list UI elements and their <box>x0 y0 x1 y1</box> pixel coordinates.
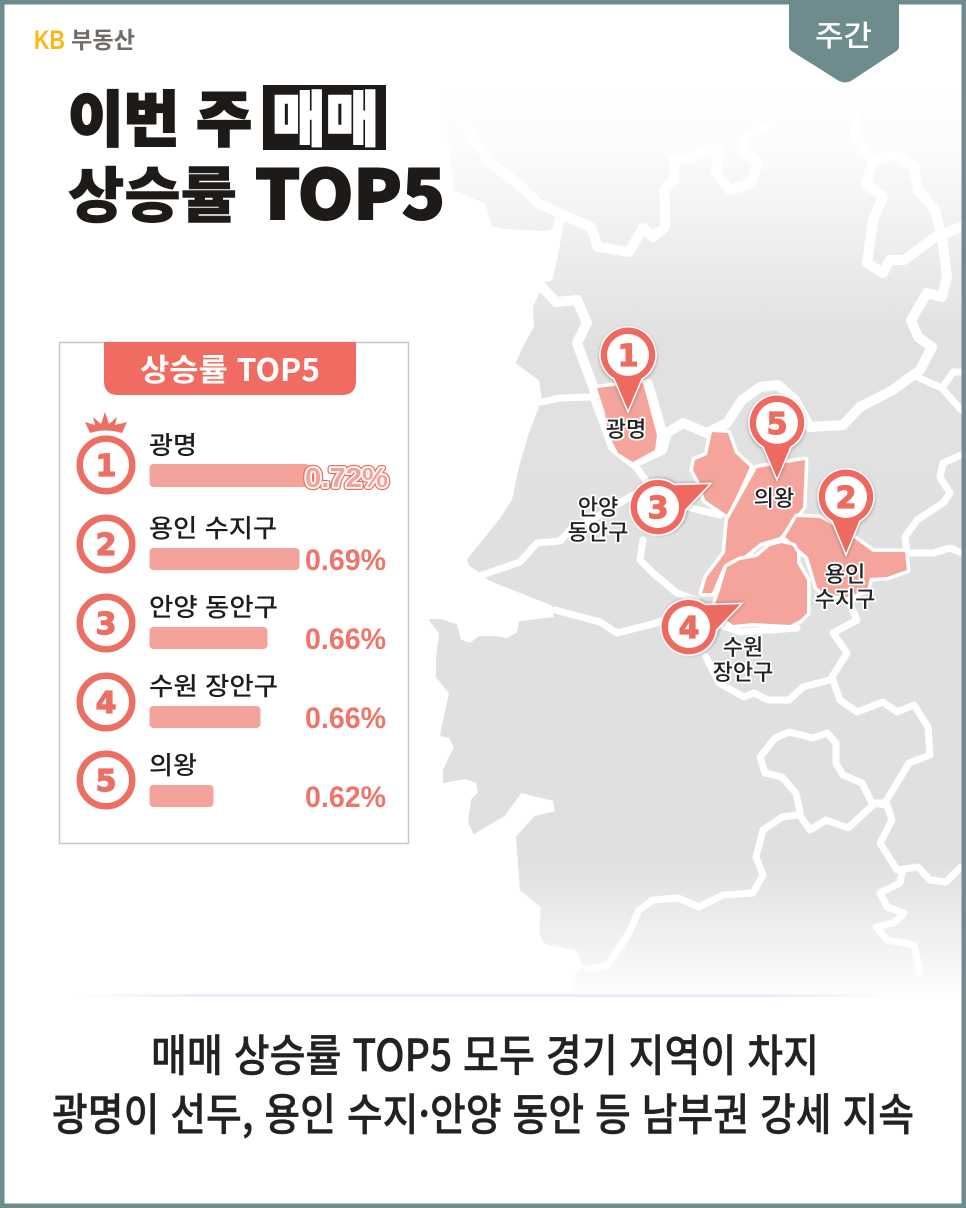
title: 이번 주 <box>68 72 252 159</box>
rank badge 4 <box>80 676 132 728</box>
highlighted district: Suwon Jangan <box>713 543 807 625</box>
row label 2: 용인 수지구 <box>149 509 277 545</box>
map label: 수원 장안구: 장안구 <box>713 655 773 687</box>
panel header <box>104 342 356 395</box>
map pin 2: 2 <box>836 481 856 516</box>
map pin 4: 4 <box>679 611 699 646</box>
logo: KB 부동산: 부동산 <box>71 21 135 55</box>
row label 1: 광명 <box>149 426 197 462</box>
map land mass <box>430 95 961 1000</box>
row label 3: 안양 동안구 <box>149 588 278 624</box>
title: TOP5 <box>255 140 445 239</box>
rank badge 5 <box>80 754 132 806</box>
rank badge 4: 4 <box>96 686 116 721</box>
title: 상승률 <box>68 148 237 235</box>
rank badge 2 <box>80 518 132 570</box>
rank badge 2: 2 <box>96 528 116 563</box>
highlighted district: Yongin Suji <box>785 517 907 597</box>
value 5: 0.62% <box>305 781 386 814</box>
bar 5 <box>150 785 214 807</box>
bar 3 <box>150 627 268 649</box>
rank badge 3 <box>80 597 132 649</box>
map pin 2 <box>818 469 874 555</box>
map boundary lines <box>455 103 962 973</box>
divider <box>70 994 900 997</box>
logo: KB 부동산 <box>34 21 135 55</box>
map label: 용인 수지구: 용인 <box>825 557 865 589</box>
logo: KB 부동산: KB <box>34 25 65 55</box>
bar 2 <box>150 548 300 570</box>
bar 4 <box>150 706 260 728</box>
map pin 1 <box>600 327 656 412</box>
panel header: 상승률 TOP5 <box>140 345 320 390</box>
rank badge 3: 3 <box>96 607 116 642</box>
title highlight box: 매매 <box>272 72 379 159</box>
value 1 outlined: 0.72% <box>305 462 388 493</box>
row label 4: 수원 장안구 <box>149 667 278 703</box>
highlighted district: Anyang Dongan <box>693 432 750 515</box>
map label: 의왕: 의왕 <box>754 481 794 513</box>
map: Gyeonggi region <box>430 95 962 1000</box>
rank badge 1: 1 <box>96 449 116 484</box>
rank badge 1 <box>80 439 132 491</box>
icon: crown <box>85 412 127 433</box>
map label: 수원 장안구: 수원 <box>723 630 763 662</box>
row label 5: 의왕 <box>149 746 197 782</box>
highlighted district: Gwangmyeong <box>597 383 657 462</box>
value 3: 0.66% <box>305 623 386 656</box>
summary text <box>52 1020 914 1143</box>
value 1 outlined: 0.72% <box>305 462 388 493</box>
weekly tag <box>789 0 899 82</box>
bar 1 <box>150 464 310 487</box>
map pin 1: 1 <box>618 339 638 374</box>
map pin 3: 3 <box>648 491 668 526</box>
map pin 3 <box>621 458 722 544</box>
panel: ranking <box>60 342 408 844</box>
rank badge 5: 5 <box>96 764 116 799</box>
map label: 광명: 광명 <box>606 412 646 444</box>
map label: 안양 동안구: 안양 <box>578 490 618 522</box>
highlighted district: Uiwang <box>702 460 805 593</box>
weekly tag: 주간 <box>815 13 872 55</box>
value 4: 0.66% <box>305 702 386 735</box>
map label: 용인 수지구: 수지구 <box>815 582 875 614</box>
map label: 안양 동안구: 동안구 <box>568 515 628 547</box>
map pin 5: 5 <box>767 407 787 442</box>
value 2: 0.69% <box>305 544 386 577</box>
map pin 5 <box>749 395 805 480</box>
map pin 4 <box>652 578 753 664</box>
summary text: 매매 상승률 TOP5 모두 경기 지역이 차지 <box>151 1020 819 1084</box>
title <box>68 72 445 239</box>
